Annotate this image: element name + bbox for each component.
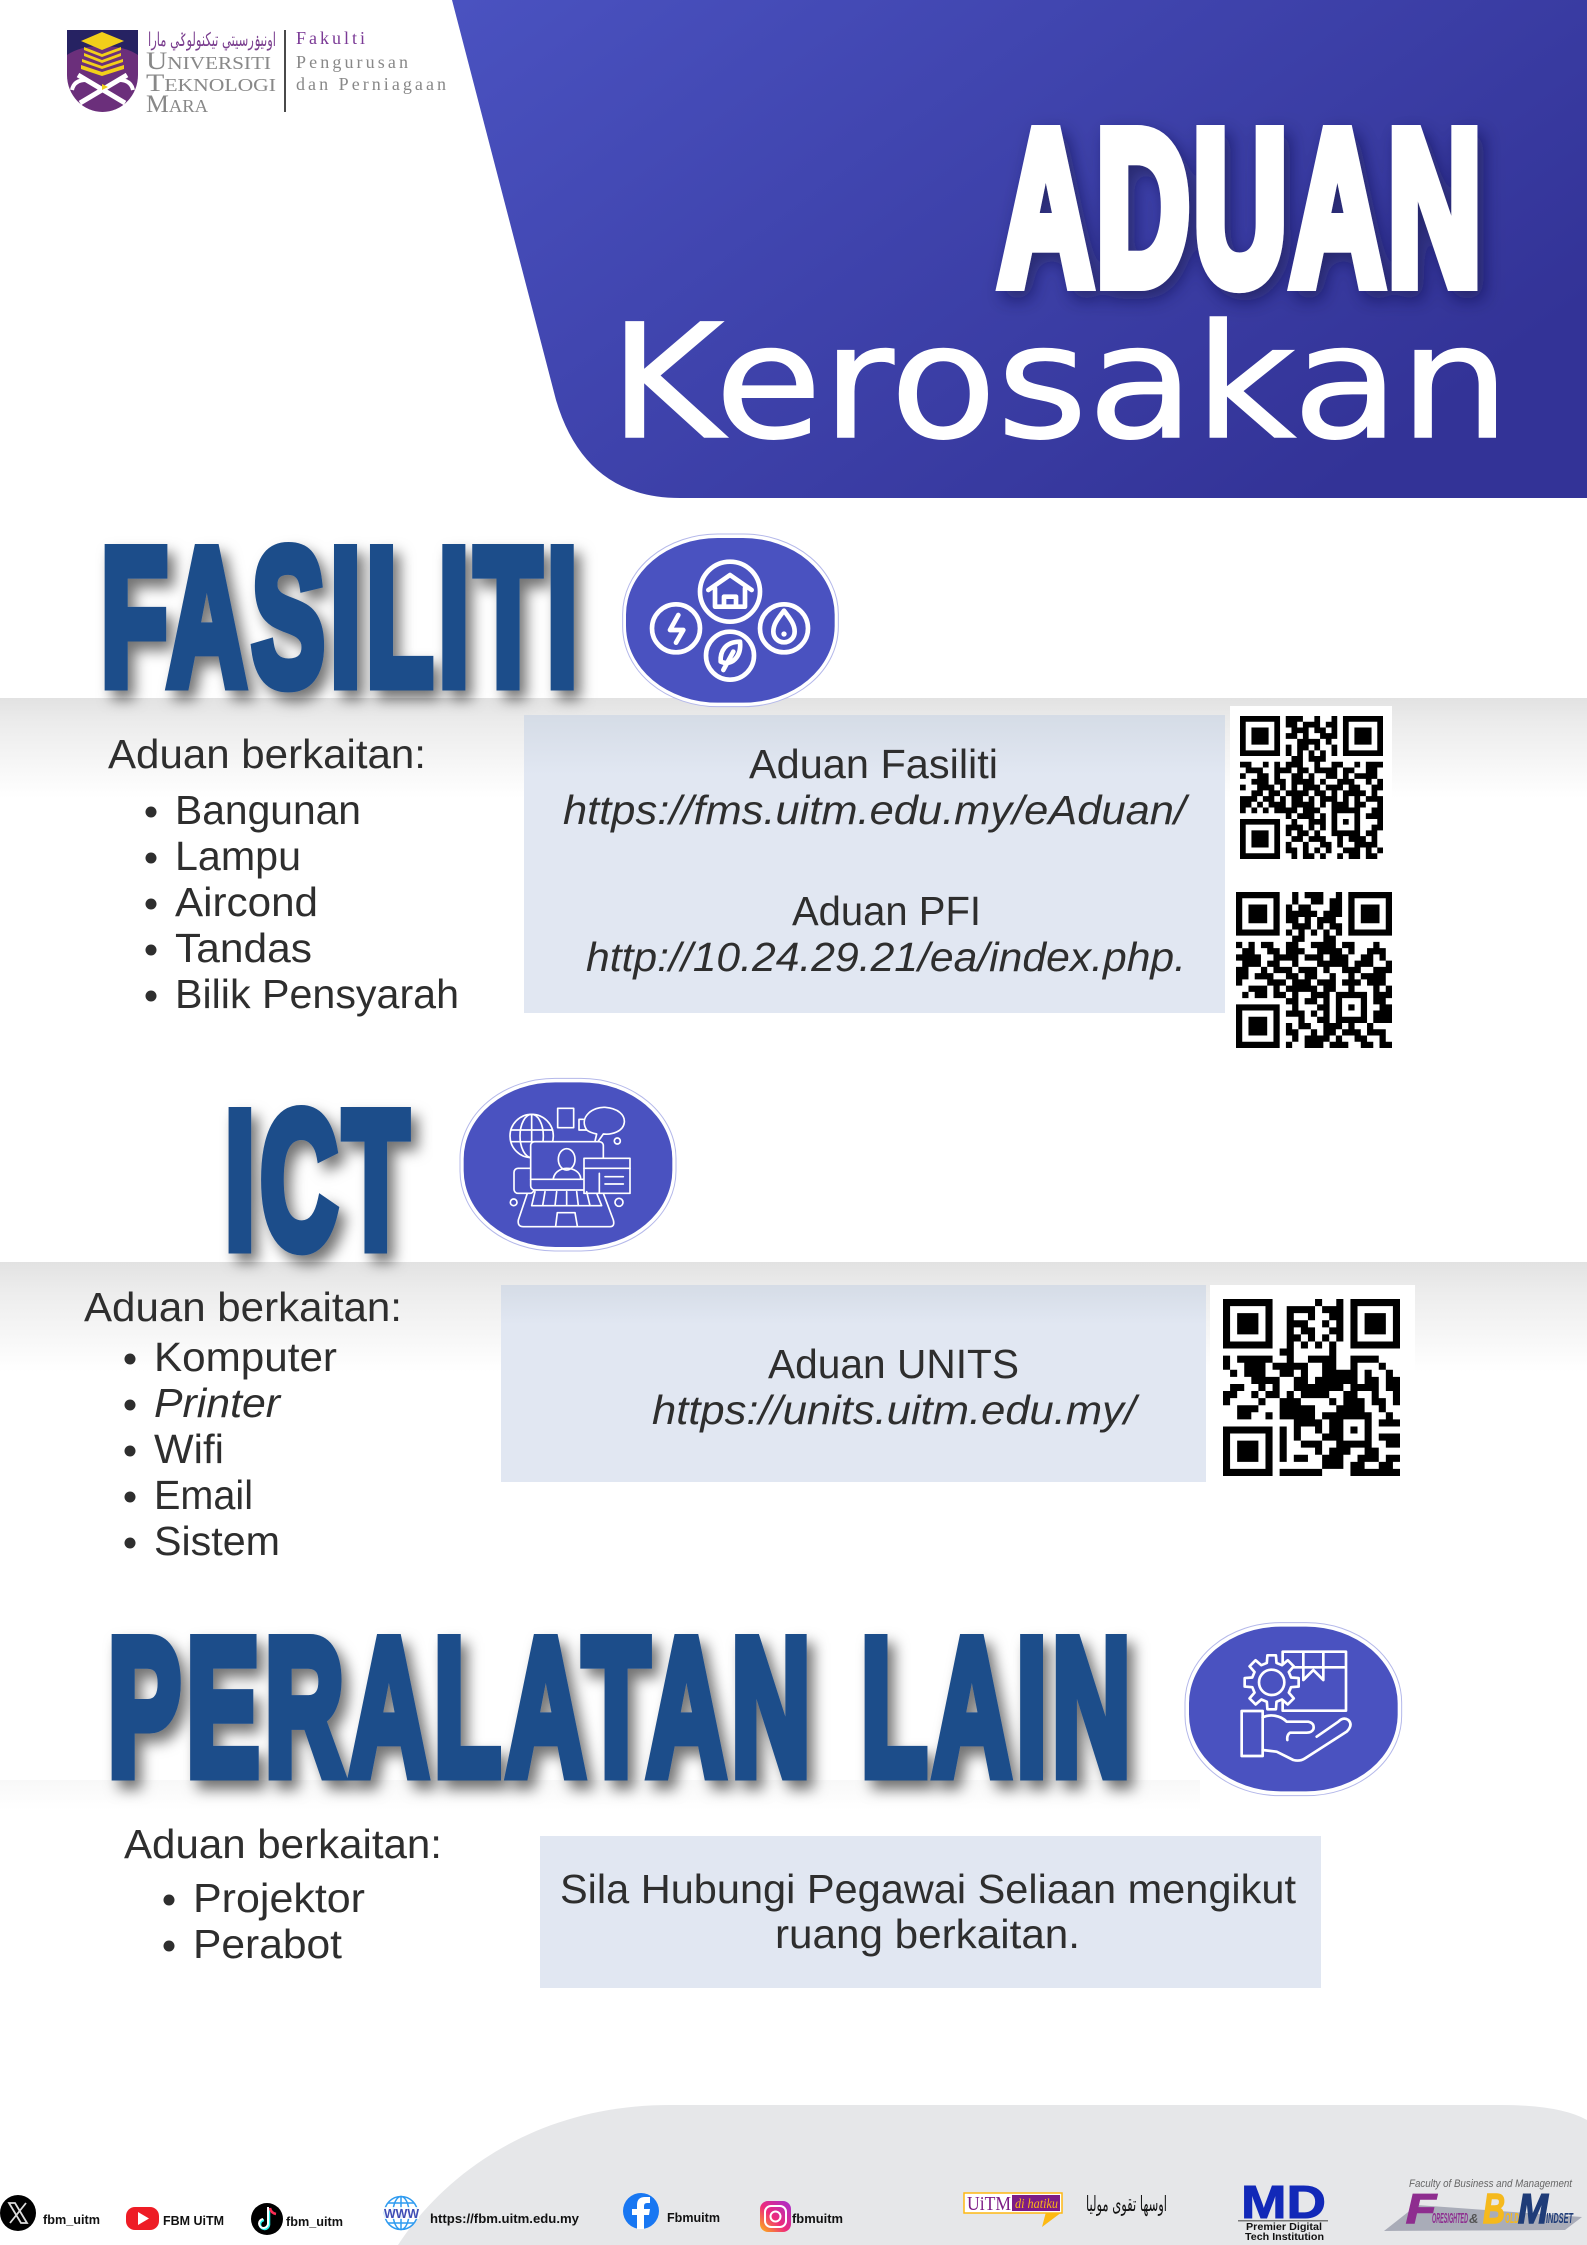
panel: link box: [501, 1285, 1206, 1482]
icon: Instagram: fbmuitm: [792, 2211, 843, 2226]
panel: link box: http://10.24.29.21/ea/index.php.: [586, 934, 1186, 980]
text block: aduan berkaitan list: Komputer: [154, 1334, 337, 1380]
icon: website: https://fbm.uitm.edu.my: [430, 2211, 580, 2226]
text block: aduan berkaitan list: Bilik Pensyarah: [175, 971, 459, 1017]
logo: UiTM di hatiku: di hatiku: [1015, 2197, 1058, 2212]
panel: link box: https://units.uitm.edu.my/: [652, 1387, 1140, 1433]
logo: Faculty of Business and Management: B: [1483, 2185, 1505, 2232]
faculty name: dan Perniagaan: [296, 74, 446, 94]
icon: Facebook: [623, 2193, 720, 2229]
icon: X: fbm_uitm: [43, 2212, 100, 2227]
QR code: PFI: [1225, 882, 1392, 1050]
panel: link box: Aduan UNITS: [768, 1341, 1019, 1387]
logo: Faculty of Business and Management: &: [1469, 2211, 1478, 2226]
text block: aduan berkaitan list: Aduan berkaitan:: [124, 1821, 442, 1867]
text block: aduan berkaitan list: Printer: [154, 1380, 282, 1426]
text block: aduan berkaitan list: Aduan berkaitan:: [108, 731, 426, 777]
icon: YouTube: FBM UiTM: [163, 2213, 224, 2228]
icon: X: [0, 2195, 100, 2231]
footer: partner logos: [964, 2176, 1582, 2243]
icon: Instagram: [760, 2201, 843, 2232]
section: peralatan lain: [124, 1821, 1321, 1988]
text block: aduan berkaitan list: Aduan berkaitan:: [84, 1284, 402, 1330]
logo: Faculty of Business and Management: [1384, 2178, 1582, 2232]
section: fasiliti: [108, 706, 1392, 1050]
heading: PERALATAN LAIN: PERALATAN: [108, 1599, 816, 1816]
text block: aduan berkaitan list: Email: [154, 1472, 253, 1518]
panel: link box: [524, 715, 1225, 1013]
icon: TikTok: [251, 2203, 343, 2235]
icon: TikTok: fbm_uitm: [286, 2214, 343, 2229]
logo: jawi motto: اوسها تقوى موليا: [1086, 2192, 1167, 2216]
icon: website: WWW: [384, 2206, 420, 2221]
university name: Mara: [146, 91, 208, 118]
jawi name: اونيۏرسيتي تيكنولوݢي مارا: [148, 29, 276, 51]
logo: Faculty of Business and Management: F: [1406, 2185, 1438, 2232]
logo: Premier Digital Tech Institution: [1238, 2176, 1328, 2243]
text block: aduan berkaitan list: Aircond: [175, 879, 318, 925]
text block: aduan berkaitan list: Perabot: [193, 1921, 343, 1967]
university name: Teknologi: [146, 70, 276, 97]
QR code: fasiliti: [1230, 706, 1392, 882]
footer: social links: [0, 2193, 843, 2235]
heading: ICT: ICT: [225, 1072, 414, 1289]
text block: aduan berkaitan list: Bangunan: [175, 787, 361, 833]
panel: link box: Aduan PFI: [792, 888, 981, 934]
text block: aduan berkaitan list: Tandas: [175, 925, 312, 971]
icon: website: [384, 2196, 580, 2230]
icon: Facebook: Fbmuitm: [667, 2210, 720, 2225]
heading: PERALATAN LAIN: LAIN: [861, 1599, 1136, 1816]
section: ict: [84, 1284, 1415, 1564]
logo: Faculty of Business and Management: OLD: [1505, 2210, 1519, 2227]
logo: Premier Digital Tech Institution: Tech Institution: [1245, 2232, 1324, 2243]
text block: aduan berkaitan list: Lampu: [175, 833, 301, 879]
text block: aduan berkaitan list: Wifi: [154, 1426, 224, 1472]
title: Kerosakan: [609, 291, 1510, 475]
logo: Faculty of Business and Management: ORESIGHTED: [1432, 2210, 1468, 2227]
text block: aduan berkaitan list: Sistem: [154, 1518, 280, 1564]
text block: aduan berkaitan list: [124, 1821, 442, 1967]
logo: UiTM Fakulti Pengurusan dan Perniagaan: [67, 28, 446, 118]
gray band sections: [0, 698, 1587, 798]
header banner: [452, 0, 1587, 498]
text block: aduan berkaitan list: Projektor: [193, 1875, 365, 1921]
icon: ICT: [460, 1078, 676, 1251]
footer background shape: [398, 2105, 1587, 2245]
university name: [146, 48, 276, 118]
text block: aduan berkaitan list: [84, 1284, 402, 1564]
icon: YouTube: [126, 2207, 224, 2230]
panel: contact note: ruang berkaitan.: [775, 1911, 1080, 1957]
logo: Faculty of Business and Management: M: [1518, 2185, 1549, 2232]
QR code: UNITS: [1210, 1285, 1415, 1480]
panel: contact note: Sila Hubungi Pegawai Seliaan mengikut: [560, 1866, 1297, 1912]
text block: aduan berkaitan list: [108, 731, 459, 1017]
logo: UiTM di hatiku: UiTM: [967, 2193, 1011, 2215]
icon: facilities: [623, 534, 838, 707]
icon: equipment: [1185, 1623, 1402, 1796]
logo: Premier Digital Tech Institution: Premier Digital: [1246, 2222, 1322, 2233]
logo: UiTM di hatiku: [964, 2193, 1062, 2227]
title: [609, 87, 1510, 475]
faculty name: [296, 28, 446, 94]
panel: link box: https://fms.uitm.edu.my/eAduan/: [563, 787, 1190, 833]
panel: contact note: [540, 1836, 1321, 1988]
university name: Universiti: [146, 48, 271, 75]
heading: FASILITI: FASILITI: [101, 509, 583, 726]
faculty name: Pengurusan: [296, 52, 408, 72]
logo: Premier Digital Tech Institution: MD: [1241, 2176, 1326, 2228]
faculty name: Fakulti: [296, 28, 365, 48]
panel: link box: Aduan Fasiliti: [749, 741, 998, 787]
icon: UiTM shield: [67, 30, 138, 112]
